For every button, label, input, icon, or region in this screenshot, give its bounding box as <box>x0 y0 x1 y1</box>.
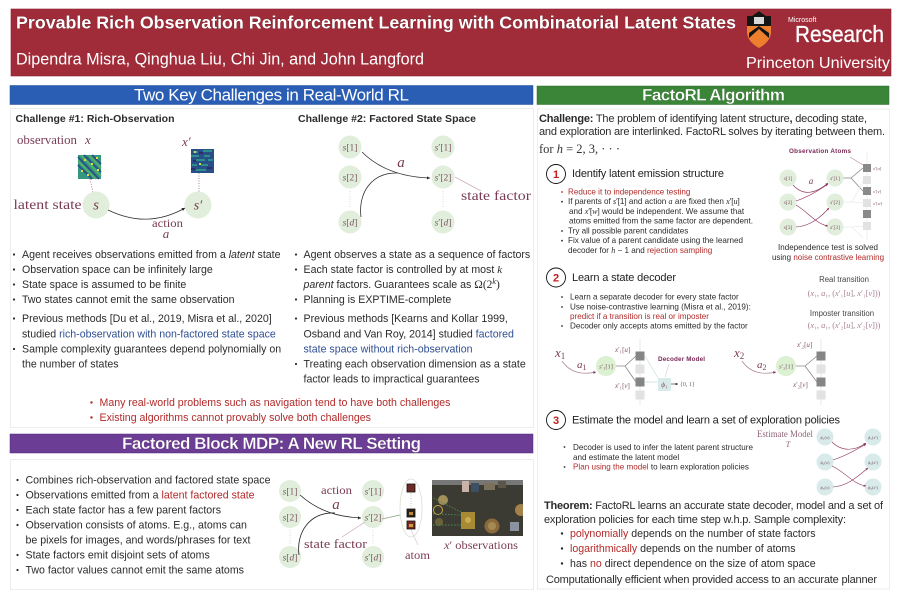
transition definitions: Real transition <box>819 275 869 284</box>
diagram: factored block MDP: s[1] <box>283 488 297 498</box>
diagram: factored block MDP: s′[2] <box>365 514 381 524</box>
step 1 bullets: decoder for h − 1 and rejection sampling <box>568 246 712 255</box>
list: challenge 1 bullets: Sample complexity guarantees depend polynomially on <box>22 344 281 356</box>
diagram: rich observation: s <box>93 198 99 214</box>
authors: Dipendra Misra, Qinghua Liu, Chi Jin, and John Langford <box>16 50 424 68</box>
diagram: observation atoms: s′[1] <box>830 176 840 182</box>
loop header: for h = 2, 3, · · · <box>539 142 620 156</box>
list: challenge 1 bullets: Observation space can be infinitely large <box>22 264 213 276</box>
theorem: Computationally efficient when provided access to an accurate planner <box>546 574 877 586</box>
diagram: rich observation: x <box>84 132 91 147</box>
diagram: factored block MDP: atom <box>405 550 430 562</box>
observation image x <box>78 155 101 179</box>
list: MDP properties: Two factor values cannot emit the same atoms <box>26 564 244 576</box>
diagram: factored block MDP: s′[1] <box>365 488 381 498</box>
diagram: imposter factor: a <box>757 359 762 371</box>
theorem: exploration policies for each time step w.h.p. Sample complexity: <box>544 514 846 526</box>
challenge statement <box>539 113 885 138</box>
diagram: decoder model: a <box>577 359 582 371</box>
list: challenge 2 bullets: k <box>492 277 496 286</box>
diagram: imposter factor: 2 <box>762 363 766 372</box>
diagram: imposter factor: x <box>734 345 740 360</box>
diagram: factored state space: s[2] <box>343 174 357 184</box>
transition definitions <box>808 275 881 330</box>
diagram: observation atoms: s[2] <box>784 200 792 206</box>
diagram: observation atoms: x′[u] <box>872 166 882 171</box>
transition definitions: (x₁, a₁, (x′₂[u], x′₂[v])) <box>808 321 881 330</box>
diagram: observation atoms: s[1] <box>784 176 792 182</box>
diagram: imposter factor: x′₂[u] <box>796 341 812 349</box>
panel: challenges <box>10 108 534 428</box>
step number 2 <box>546 268 566 287</box>
diagram: factored block MDP: action <box>321 483 352 497</box>
diagram: observation atoms: s′[3] <box>830 225 840 231</box>
diagram caption <box>772 243 884 262</box>
observation photo <box>432 480 523 536</box>
diagram: decoder model: 1 <box>561 351 565 361</box>
Microsoft Research logo: Microsoft <box>788 17 816 24</box>
theorem <box>544 500 884 586</box>
theorem: logarithmically depends on the number of atoms <box>570 543 796 555</box>
diagram: rich observation: latent state <box>14 197 82 212</box>
step 1 bullets: If parents of s′[1] and action a are fixed then x′[u] <box>568 197 740 206</box>
theorem: has no direct dependence on the size of atom space <box>570 558 816 570</box>
list: challenge 2 bullets: state space without rich-observation <box>304 344 473 356</box>
diagram: estimate model: Estimate Model <box>757 429 813 439</box>
affiliation: Princeton University <box>746 55 890 72</box>
diagram: decoder model: x <box>555 345 561 360</box>
title: Provable Rich Observation Reinforcement Learning with Combinatorial Latent States <box>16 12 736 32</box>
diagram: decoder model: s′₁[1] <box>599 364 613 370</box>
theorem: Theorem: FactoRL learns an accurate state decoder, model and a set of <box>544 500 884 512</box>
panel heading: Two Key Challenges <box>10 86 533 104</box>
diagram: rich observation: x′ <box>181 134 191 149</box>
diagram: factored state space: state factor <box>461 189 531 204</box>
diagram: factored block MDP <box>279 479 527 568</box>
transition definitions: (x₁, a₁, (x′₁[u], x′₁[v])) <box>808 289 881 298</box>
Microsoft Research logo: Research <box>795 21 884 47</box>
list: challenge 2 bullets: Planning is EXPTIME-complete <box>304 294 451 306</box>
diagram: factored block MDP: s[2] <box>283 514 297 524</box>
diagram: rich observation: action <box>152 216 183 230</box>
diagram: estimate model: ϕ₂(x) <box>821 460 830 465</box>
diagram: observation atoms: Observation Atoms <box>789 148 851 155</box>
step number 3 <box>546 410 566 430</box>
diagram: factored state space: s′[d] <box>435 218 451 228</box>
list: challenge 1 bullets: State space is assumed to be finite <box>22 279 186 291</box>
list: challenge 2 bullets <box>295 249 530 386</box>
step 1 title: Identify latent emission structure <box>572 168 724 180</box>
diagram: factored block MDP: s[d] <box>283 554 297 564</box>
diagram: estimate model: ϕ₁(x′) <box>868 435 878 440</box>
panel heading: FactoRL Algorithm <box>537 86 889 104</box>
diagram: estimate model: ϕ₃(x′) <box>868 485 878 490</box>
diagram: decoder model: x′₁[u] <box>614 346 630 354</box>
step 1 bullets <box>561 188 753 255</box>
panel heading: FactoRL Algorithm: FactoRL Algorithm <box>642 86 785 104</box>
diagram: rich observation <box>14 132 214 241</box>
list: challenge 1 bullets: studied rich-observation with non-factored state space <box>22 328 276 340</box>
list: challenge 1 bullets: Two states cannot emit the same observation <box>22 294 235 306</box>
step 3 title: Estimate the model and learn a set of exploration policies <box>572 414 840 426</box>
theorem: polynomially depends on the number of state factors <box>570 528 816 540</box>
panel heading: Two Key Challenges: Two Key Challenges in Real-World RL <box>134 86 409 104</box>
diagram: rich observation: observation <box>17 133 78 147</box>
diagram: decoder model: ϕ₁ <box>661 380 668 389</box>
list: MDP properties: Observation consists of atoms. E.g., atoms can <box>26 520 247 532</box>
step 2 <box>546 268 881 405</box>
state s prime <box>184 192 212 218</box>
transition definitions: Imposter transition <box>810 309 874 318</box>
observation image x prime <box>191 149 214 173</box>
diagram caption: using noise contrastive learning <box>772 253 884 262</box>
diagram caption: Independence test is solved <box>778 243 878 252</box>
diagram: imposter factor: 2 <box>740 351 744 361</box>
step 3 bullets <box>564 443 753 472</box>
diagram: factored state space: a <box>397 155 405 171</box>
atom group <box>400 479 422 537</box>
callout: both challenges: Existing algorithms cannot provably solve both challenges <box>100 412 371 424</box>
step 1 bullets: atoms emitted from the same factor are dependent. <box>569 217 753 226</box>
diagram: decoder model: {0, 1} <box>680 382 695 388</box>
panel heading: Factored Block MDP: Factored Block MDP: A New RL Setting <box>122 434 421 453</box>
list: challenge 1 bullets: Agent receives observations emitted from a latent state <box>22 249 281 261</box>
step 2 title: Learn a state decoder <box>572 272 676 284</box>
diagram: observation atoms <box>780 148 882 240</box>
state s <box>82 192 110 218</box>
diagram: rich observation: s′ <box>194 198 203 214</box>
diagram: imposter factor: x′₂[v] <box>792 381 808 389</box>
step 3 <box>546 410 882 496</box>
diagram: factored block MDP: a <box>332 497 340 513</box>
diagram: observation atoms: a <box>809 176 814 186</box>
step 2 bullets: Decoder only accepts atoms emitted by the factor <box>570 322 748 331</box>
diagram: estimate model: T <box>786 440 791 449</box>
step 3 bullets: and estimate the latent model <box>573 453 679 462</box>
list: challenge 2 bullets: Osband and Van Roy, 2014] studied factored <box>304 328 514 340</box>
list: challenge 1 bullets: the number of states <box>22 358 119 370</box>
step 1 bullets: and x′[w] would be independent. We assume that <box>569 207 745 216</box>
diagram: observation atoms: x′[w] <box>872 201 882 206</box>
diagram: factored state space <box>338 136 531 234</box>
diagram: decoder model <box>554 339 705 405</box>
step 1 bullets: Try all possible parent candidates <box>568 226 688 236</box>
diagram: factored state space: s[1] <box>343 144 357 154</box>
panel heading: Factored Block MDP <box>10 434 533 453</box>
diagram: observation atoms: s′[2] <box>830 200 840 206</box>
diagram: factored state space: s[d] <box>343 218 357 228</box>
challenge statement: and exploration are interlinked. FactoRL solves by iterating between them. <box>539 126 885 138</box>
diagram: estimate model <box>757 428 882 496</box>
diagram: estimate model: ϕ₁(x) <box>821 435 830 440</box>
step 1 bullets: Reduce it to independence testing <box>568 188 690 196</box>
diagram: factored block MDP: state factor <box>304 536 368 551</box>
diagram: decoder model: Decoder Model <box>658 356 705 363</box>
callout: both challenges <box>90 397 450 424</box>
heading: challenge 1: Challenge #1: Rich-Observation <box>16 113 174 125</box>
step number 1 <box>546 164 566 184</box>
step 1 <box>546 148 884 262</box>
list: MDP properties <box>16 474 271 576</box>
diagram: imposter factor: s′₂[1] <box>779 364 793 370</box>
diagram: estimate model: ϕ₂(x′) <box>868 460 878 465</box>
diagram: estimate model: ϕ₃(x) <box>821 485 830 490</box>
panel: FactoRL algorithm <box>538 109 890 589</box>
step 3 bullets: Plan using the model to learn exploration policies <box>573 462 749 472</box>
diagram: factored block MDP: s′[d] <box>365 554 381 564</box>
list: challenge 2 bullets: Agent observes a state as a sequence of factors <box>304 249 530 261</box>
panel: factored block MDP <box>10 460 534 590</box>
step number 1: 1 <box>553 169 559 181</box>
diagram: decoder model: x′₁[v] <box>614 382 630 390</box>
list: challenge 2 bullets: Previous methods [Kearns and Kollar 1999, <box>304 313 508 325</box>
heading: challenge 2: Challenge #2: Factored State Space <box>298 113 476 125</box>
step 2 bullets: predict if a transition is real or imposter <box>570 312 709 321</box>
list: challenge 1 bullets: Previous methods [Du et al., 2019, Misra et al., 2020] <box>22 313 272 325</box>
diagram: factored state space: s′[1] <box>435 144 451 154</box>
list: challenge 2 bullets: Treating each observation dimension as a state <box>304 358 526 370</box>
list: challenge 2 bullets: ) <box>496 279 500 291</box>
list: MDP properties: Each state factor has a few parent factors <box>26 504 221 516</box>
step 2 bullets: Use noise-contrastive learning (Misra et al., 2019): <box>570 302 751 312</box>
diagram: observation atoms: s[3] <box>784 225 792 231</box>
diagram: observation atoms: x′[v] <box>872 189 881 194</box>
list: MDP properties: be pixels for images, and words/phrases for text <box>26 534 250 546</box>
diagram: imposter factor <box>733 339 826 405</box>
challenge statement: Challenge: The problem of identifying latent structure, decoding state, <box>539 113 867 125</box>
icon: Princeton shield <box>747 11 771 48</box>
step number 2: 2 <box>553 272 559 284</box>
list: MDP properties: Observations emitted from a latent factored state <box>26 490 255 502</box>
step 2 bullets <box>561 292 751 331</box>
step 2 bullets: Learn a separate decoder for every state factor <box>570 292 739 302</box>
header banner <box>11 9 891 76</box>
diagram: factored block MDP: x′ observations <box>443 540 519 552</box>
list: challenge 1 bullets <box>13 249 281 370</box>
list: MDP properties: State factors emit disjoint sets of atoms <box>26 550 210 562</box>
step 1 bullets: Fix value of a parent candidate using the learned <box>568 236 743 245</box>
list: challenge 2 bullets: Each state factor is controlled by at most k <box>304 264 503 276</box>
step 3 bullets: Decoder is used to infer the latent parent structure <box>573 443 753 452</box>
diagram: factored state space: s′[2] <box>435 174 451 184</box>
list: challenge 2 bullets: factor leads to impractical guarantees <box>304 374 480 386</box>
step number 3: 3 <box>553 415 559 427</box>
diagram: rich observation: a <box>163 226 170 241</box>
callout: both challenges: Many real-world problems such as navigation tend to have both challenges <box>100 397 450 409</box>
list: MDP properties: Combines rich-observation and factored state space <box>26 474 271 486</box>
list: challenge 2 bullets: parent factors. Guarantees scale as Ω(2 <box>304 279 492 291</box>
diagram: decoder model: 1 <box>582 363 586 372</box>
